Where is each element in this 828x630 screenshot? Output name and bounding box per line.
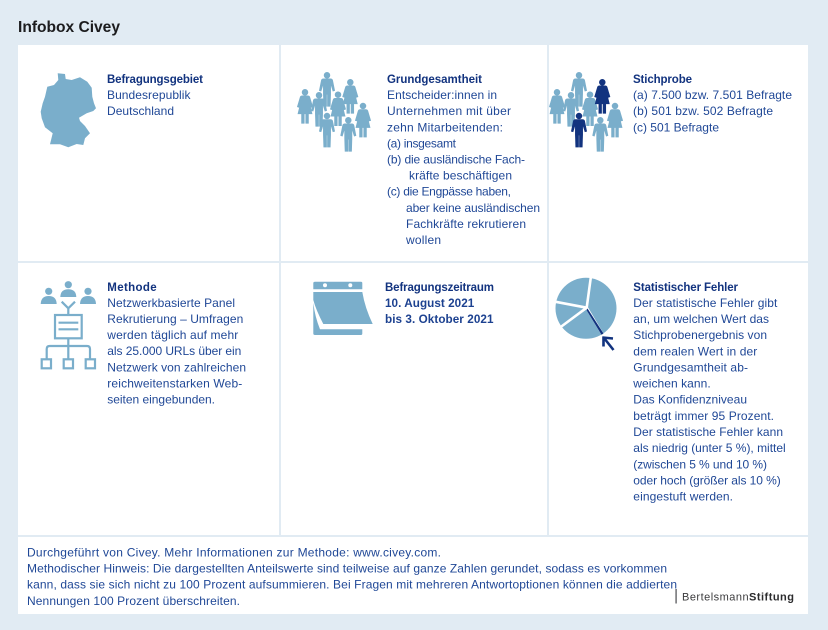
title: Infobox Civey	[18, 19, 120, 36]
text: Befragungszeitraum	[385, 282, 494, 326]
text: Methode: Netzwerkbasierte Panel	[107, 296, 235, 310]
icon: map of Germany	[41, 73, 96, 147]
panel: Stichprobe	[549, 45, 808, 261]
text: Statistischer Fehler: Stichprobenergebnis von	[633, 328, 767, 342]
text: Grundgesamtheit: zehn Mitarbeitenden:	[387, 120, 503, 134]
text: Statistischer Fehler: Statistischer Fehler	[633, 282, 739, 294]
panel: Befragungszeitraum	[281, 263, 547, 535]
text: Statistischer Fehler: beträgt immer 95 Prozent.	[633, 409, 774, 423]
text: Statistischer Fehler: als niedrig (unter 5 %), mittel	[633, 441, 786, 455]
text: methodological note: Methodischer Hinweis: Die dargestellten Anteilswerte sind teilweise auf ganze Zahlen gerundet, sodass es vorkommen	[27, 562, 667, 576]
text: Statistischer Fehler: an, um welchen Wert das	[633, 312, 769, 326]
icon: pie chart with arrow	[555, 276, 616, 350]
text: Grundgesamtheit	[387, 74, 540, 247]
text: Statistischer Fehler: dem realen Wert in der	[633, 344, 757, 358]
text: Statistischer Fehler: oder hoch (größer als 10 %)	[633, 474, 781, 488]
text: Statistischer Fehler: eingestuft werden.	[633, 490, 733, 504]
text: Statistischer Fehler: Der statistische Fehler gibt	[633, 296, 778, 310]
panel: Befragungsgebiet	[18, 45, 279, 261]
text: Befragungsgebiet: Befragungsgebiet	[107, 74, 203, 86]
panel: Grundgesamtheit	[281, 45, 547, 261]
text: Methode: Netzwerk von zahlreichen	[107, 360, 246, 374]
text: methodological note	[27, 545, 677, 608]
text: Befragungsgebiet: Deutschland	[107, 104, 174, 118]
text: Stichprobe: (b) 501 bzw. 502 Befragte	[633, 104, 773, 118]
text: Methode: Methode	[107, 282, 157, 294]
text: Befragungszeitraum: 10. August 2021	[385, 297, 475, 310]
icon: calendar	[313, 282, 373, 335]
text: Stichprobe: (c) 501 Befragte	[633, 120, 719, 134]
text: Methode: reichweitenstarken Web-	[107, 376, 242, 390]
text: Grundgesamtheit: (a) insgesamt	[387, 136, 457, 150]
icon: population group	[297, 72, 371, 151]
text: Befragungsgebiet: Bundesrepublik	[107, 88, 192, 102]
text: Methode: als 25.000 URLs über ein	[107, 344, 241, 358]
text: Grundgesamtheit: wollen	[405, 233, 441, 247]
text: Grundgesamtheit: Unternehmen mit über	[387, 104, 511, 118]
text: Statistischer Fehler: (zwischen 5 % und 10 %)	[633, 457, 767, 471]
text: Methode: Rekrutierung – Umfragen	[107, 312, 243, 326]
text: Statistischer Fehler	[632, 282, 786, 504]
text: Methode: werden täglich auf mehr	[106, 328, 238, 342]
text: Grundgesamtheit: Grundgesamtheit	[387, 74, 482, 86]
text: Grundgesamtheit: Fachkräfte rekrutieren	[406, 217, 526, 231]
text: Statistischer Fehler: Das Konfidenzniveau	[633, 393, 747, 407]
text: Statistischer Fehler: Grundgesamtheit ab-	[633, 360, 748, 374]
text: Befragungszeitraum: Befragungszeitraum	[385, 282, 494, 294]
text: Grundgesamtheit: kräfte beschäftigen	[409, 169, 512, 183]
text: Methode	[106, 282, 246, 406]
text: Grundgesamtheit: (b) die ausländische Fach-	[387, 152, 525, 166]
text: methodological note: Durchgeführt von Civey. Mehr Informationen zur Methode: www.civey.com.	[27, 545, 441, 559]
panel: Statistischer Fehler	[549, 263, 808, 535]
text: Stichprobe: (a) 7.500 bzw. 7.501 Befragte	[633, 88, 792, 102]
icon: sample group	[549, 72, 623, 151]
text: Grundgesamtheit: Entscheider:innen in	[387, 88, 497, 102]
text: Befragungsgebiet	[107, 74, 203, 118]
panel: Methode	[18, 263, 279, 535]
panel: methodological note	[18, 537, 808, 614]
text: Stichprobe	[633, 74, 792, 134]
text: Statistischer Fehler: weichen kann.	[632, 377, 711, 391]
text: Grundgesamtheit: aber keine ausländischen	[406, 201, 540, 215]
logo: Bertelsmann Stiftung: BertelsmannStiftung	[682, 592, 794, 604]
text: methodological note: Nennungen 100 Prozent überschreiten.	[27, 594, 240, 608]
text: Befragungszeitraum: bis 3. Oktober 2021	[385, 313, 494, 326]
text: Methode: seiten eingebunden.	[107, 392, 215, 406]
text: Statistischer Fehler: Der statistische Fehler kann	[633, 425, 783, 439]
text: Grundgesamtheit: (c) die Engpässe haben,	[387, 185, 511, 199]
icon: network method diagram	[41, 281, 96, 368]
text: methodological note: kann, dass sie sich nicht zu 100 Prozent aufsummieren. Bei Fragen mit mehreren Antwortoptionen können die addierten	[27, 578, 677, 592]
text: Stichprobe: Stichprobe	[633, 74, 692, 86]
